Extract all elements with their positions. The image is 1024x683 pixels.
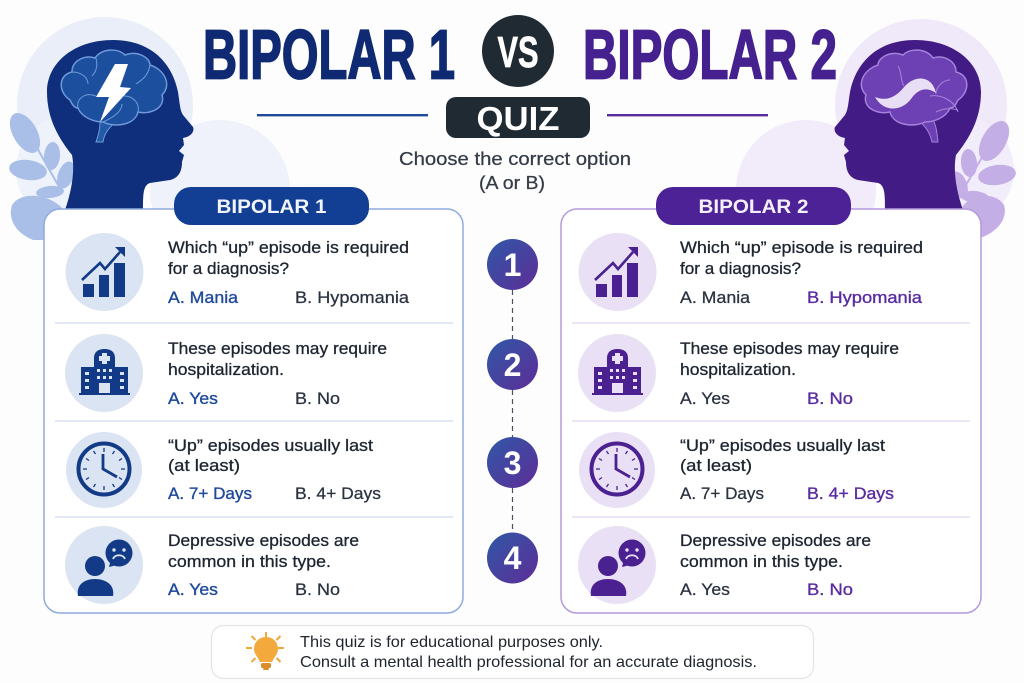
question 2: A. Yes <box>168 389 218 408</box>
question 1: Which “up” episode is required <box>168 238 409 257</box>
question 1: B. Hypomania <box>807 288 923 307</box>
question 3: B. 4+ Days <box>807 484 894 503</box>
question 4: Depressive episodes are <box>168 531 359 550</box>
number 2 <box>487 339 538 390</box>
icon: clock <box>579 432 655 508</box>
heading pill: bipolar 2 <box>656 187 851 225</box>
question 2: hospitalization. <box>168 360 284 379</box>
badge: QUIZ: QUIZ <box>476 100 560 137</box>
question 4: A. Yes <box>680 580 730 599</box>
panel: bipolar 2 <box>561 187 981 613</box>
title: BIPOLAR 2: BIPOLAR 2 <box>583 16 837 94</box>
number 3 <box>487 437 538 488</box>
number 2: 2 <box>504 347 521 383</box>
question 4: common in this type. <box>680 552 843 571</box>
question 3: A. 7+ Days <box>680 484 764 503</box>
number 1: 1 <box>504 247 521 283</box>
question 1: A. Mania <box>168 288 239 307</box>
icon: person with sad speech bubble <box>65 526 143 604</box>
question 1: for a diagnosis? <box>680 259 801 278</box>
icon: hospital <box>65 334 143 412</box>
question 4 <box>578 526 871 604</box>
question 4: B. No <box>807 580 853 599</box>
badge: VS: VS <box>498 28 538 77</box>
question 3: A. 7+ Days <box>168 484 252 503</box>
number 4: 4 <box>504 540 522 576</box>
icon: rising chart <box>66 233 144 311</box>
question 3: “Up” episodes usually last <box>680 436 885 455</box>
question 1: Which “up” episode is required <box>680 238 923 257</box>
footer disclaimer: This quiz is for educational purposes only. <box>300 634 603 651</box>
question 3: B. 4+ Days <box>295 484 381 503</box>
question 2: B. No <box>807 389 853 408</box>
heading pill: bipolar 1 <box>174 187 369 225</box>
footer disclaimer <box>212 626 814 678</box>
question 4: B. No <box>295 580 340 599</box>
instruction text: (A or B) <box>479 172 545 193</box>
panel: bipolar 1 <box>44 187 463 613</box>
question 4: common in this type. <box>168 552 331 571</box>
illustration: bipolar 2 head <box>736 19 1017 260</box>
question 2 <box>578 334 899 412</box>
question 2 <box>65 334 387 412</box>
badge: QUIZ <box>446 97 590 138</box>
number 1 <box>487 239 538 290</box>
icon: light bulb <box>246 632 284 670</box>
instruction text: Choose the correct option <box>399 148 631 169</box>
icon: rising chart <box>578 233 656 311</box>
question 1: A. Mania <box>680 288 751 307</box>
question 4: A. Yes <box>168 580 218 599</box>
question 1 <box>578 233 923 311</box>
question 3 <box>579 432 894 508</box>
icon: person with sad speech bubble <box>578 526 656 604</box>
badge: VS <box>482 15 554 87</box>
instruction text <box>399 148 631 193</box>
heading pill: bipolar 1: BIPOLAR 1 <box>216 196 327 218</box>
illustration: bipolar 1 head <box>4 17 290 260</box>
icon: hospital <box>578 334 656 412</box>
title: BIPOLAR 1: BIPOLAR 1 <box>203 16 455 94</box>
question 1: B. Hypomania <box>295 288 410 307</box>
number 3: 3 <box>504 445 521 481</box>
number 4 <box>487 532 538 584</box>
icon: clock <box>66 432 142 508</box>
question 3: (at least) <box>680 456 752 475</box>
question 4: Depressive episodes are <box>680 531 871 550</box>
question 1: for a diagnosis? <box>168 259 289 278</box>
question 2: hospitalization. <box>680 360 796 379</box>
question 3: “Up” episodes usually last <box>168 436 373 455</box>
heading pill: bipolar 2: BIPOLAR 2 <box>698 196 809 218</box>
question 4 <box>65 526 359 604</box>
number column <box>487 239 538 584</box>
question 2: These episodes may require <box>680 339 899 358</box>
question 3: (at least) <box>168 456 240 475</box>
question 1 <box>66 233 410 311</box>
question 2: B. No <box>295 389 340 408</box>
question 3 <box>66 432 381 508</box>
question 2: These episodes may require <box>168 339 387 358</box>
question 2: A. Yes <box>680 389 730 408</box>
footer disclaimer: Consult a mental health professional for an accurate diagnosis. <box>300 654 757 671</box>
